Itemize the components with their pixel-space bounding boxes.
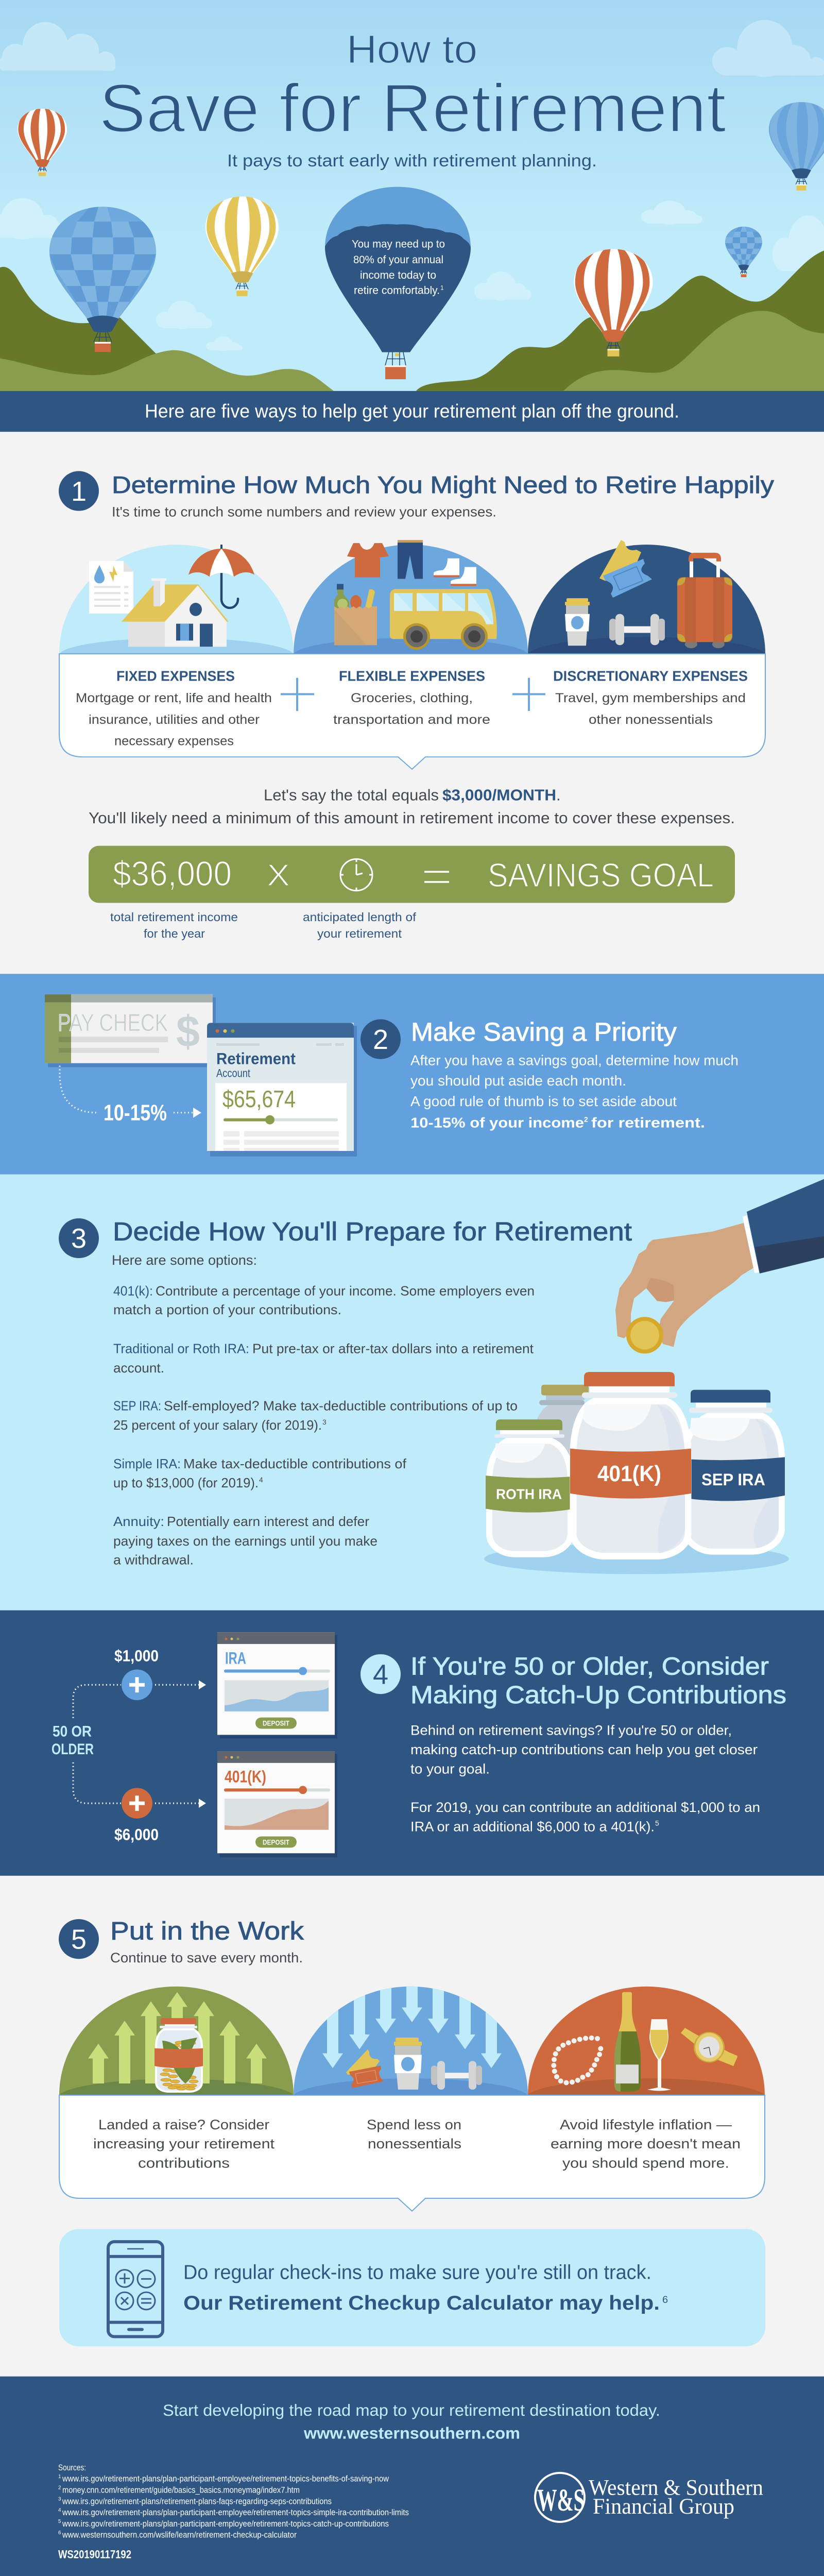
callout: calculator: 6	[662, 2294, 668, 2306]
lifestyle text: earning more doesn't mean	[551, 2136, 741, 2151]
title: Save for Retirement: Save for Retirement	[99, 70, 726, 146]
plus sign	[512, 678, 545, 711]
text block: step 2: After you have a savings goal, determine how much	[410, 1053, 739, 1069]
icon: utility bill	[89, 561, 133, 614]
balloon text: You may need up to	[352, 239, 445, 250]
icon: champagne bottle	[614, 1992, 641, 2092]
icon: orange balloon small	[18, 108, 67, 176]
text block: retirement options	[113, 1284, 535, 1567]
text block: step 2	[360, 1017, 739, 1130]
dome: fixed expenses	[59, 545, 294, 654]
flexible expenses text	[333, 668, 490, 727]
text block: step 3 heading: 3	[71, 1223, 87, 1254]
icon: coffee cup	[394, 2038, 422, 2090]
panel: hero sky	[0, 0, 824, 393]
icon: umbrella	[188, 545, 254, 608]
flexible expenses text: FLEXIBLE EXPENSES	[339, 668, 485, 684]
text block: total equals: Let's say the total equals	[264, 786, 439, 804]
title: How to: How to	[347, 27, 477, 72]
text block: retirement options: up to $13,000 (for 2019).	[113, 1476, 259, 1490]
down arrows	[322, 1980, 502, 2068]
sources: WS20190117192	[58, 2548, 131, 2561]
spend text	[367, 2117, 461, 2151]
text block: step 2: A good rule of thumb is to set aside about	[410, 1093, 677, 1109]
icon: savings jars	[484, 1372, 789, 1574]
panel: savings goal formula: SAVINGS GOAL	[488, 856, 714, 894]
discretionary expenses text: DISCRETIONARY EXPENSES	[553, 668, 748, 684]
text block: step 3 heading: Decide How You'll Prepare for Retirement	[113, 1217, 632, 1246]
panel: step 1 heading: 1	[71, 476, 87, 507]
icon: coffee cup	[565, 598, 590, 646]
subtitle: It pays to start early with retirement planning.	[227, 151, 597, 171]
banner: Here are five ways to help get your retirement plan off the ground.	[145, 401, 679, 421]
text block: retirement options: 4	[259, 1476, 263, 1484]
text block: total equals	[89, 786, 735, 827]
text block: retirement options: 401(k):	[113, 1284, 153, 1298]
icon: orange balloon large	[574, 248, 653, 357]
callout: calculator: Do regular check-ins to make sure you're still on track.	[183, 2262, 651, 2283]
panel: savings goal formula: X	[267, 858, 290, 892]
raise text: increasing your retirement	[93, 2136, 275, 2151]
text block: step 5 heading	[59, 1917, 304, 1965]
text block: total equals: You'll likely need a minimum of this amount in retirement income to cover these expenses.	[89, 809, 735, 827]
panel: expenses box	[59, 654, 765, 769]
sources: 5	[58, 2519, 61, 2524]
formula captions	[110, 910, 417, 940]
footer call to action: www.westernsouthern.com	[303, 2424, 520, 2442]
text block: step 4: If You're 50 or Older, Consider	[410, 1653, 769, 1680]
lifestyle text	[551, 2117, 741, 2171]
text block: retirement options: a withdrawal.	[113, 1553, 194, 1567]
spend text: nonessentials	[368, 2136, 461, 2151]
footer call to action	[163, 2401, 660, 2442]
text block: step 4: Behind on retirement savings? If you're 50 or older,	[410, 1722, 732, 1738]
jar: 401k	[570, 1372, 691, 1556]
text block: step 3 heading	[59, 1217, 632, 1268]
chart: IRA window: IRA	[225, 1649, 246, 1668]
text block: step 4: 5	[655, 1819, 659, 1827]
text block: step 4: For 2019, you can contribute an additional $1,000 to an	[410, 1800, 760, 1815]
panel: step 1 heading: Determine How Much You Might Need to Retire Happily	[112, 471, 775, 498]
icon: pay check	[45, 994, 216, 1067]
icon: suitcase	[677, 553, 732, 648]
sources	[58, 2463, 409, 2561]
balloon text: income today to	[360, 269, 436, 281]
icon: retirement account window: $65,674	[222, 1086, 296, 1112]
icon: hand with coin	[615, 1179, 824, 1353]
callout: calculator	[59, 2229, 765, 2346]
formula captions: for the year	[144, 927, 205, 940]
text block: step 2: for retirement.	[591, 1115, 705, 1130]
icon: champagne glass	[647, 2019, 671, 2091]
spend text: Spend less on	[367, 2117, 461, 2132]
flexible expenses text: transportation and more	[333, 713, 490, 727]
panel: savings goal formula	[89, 846, 735, 903]
raise text: contributions	[138, 2156, 230, 2171]
chart: 401(k) window: DEPOSIT	[263, 1838, 289, 1846]
sources: money.cnn.com/retirement/guide/basics_basics.moneymag/index7.htm	[62, 2485, 300, 2495]
sources: www.irs.gov/retirement-plans/plan-participant-employee/retirement-topics-benefits-of-saving-now	[62, 2474, 389, 2484]
formula captions: your retirement	[317, 927, 402, 940]
icon: watch	[681, 2028, 737, 2066]
logo: Western & Southern	[535, 2473, 763, 2522]
icon: pearls	[554, 2038, 600, 2082]
diagram: 50 or older flow	[52, 1647, 206, 1843]
text block: retirement options: 3	[322, 1418, 327, 1426]
text block: step 4: IRA or an additional $6,000 to a 401(k).	[410, 1819, 655, 1835]
balloon text: 80% of your annual	[353, 254, 443, 266]
panel: step 2 background	[0, 974, 824, 1175]
text block: retirement options: Simple IRA:	[113, 1457, 181, 1471]
sources: 3	[58, 2496, 61, 2502]
balloon text	[352, 239, 445, 297]
plus sign	[281, 678, 314, 711]
formula captions: anticipated length of	[303, 910, 417, 924]
panel: step 4 background	[0, 1611, 824, 1876]
icon: tickets	[346, 2049, 384, 2088]
sources: www.irs.gov/retirement-plans/plan-participant-employee/retirement-topics-catch-up-contributions	[62, 2519, 389, 2529]
icon: bus	[390, 589, 497, 650]
icon: yellow balloon	[205, 196, 279, 296]
icon: central balloon with message	[325, 187, 471, 379]
text block: retirement options: Contribute a percentage of your income. Some employers even	[156, 1284, 535, 1298]
text block: retirement options: Put pre-tax or after-tax dollars into a retirement	[252, 1342, 534, 1356]
text block: retirement options: Potentially earn interest and defer	[167, 1515, 369, 1529]
chart: 401(k) window	[217, 1751, 337, 1857]
icon: small patchwork balloon	[725, 227, 762, 277]
balloon text: retire comfortably.	[354, 285, 440, 297]
sources: www.irs.gov/retirement-plans/retirement-plans-faqs-regarding-seps-contributions	[62, 2496, 332, 2506]
flexible expenses text: Groceries, clothing,	[351, 691, 473, 705]
logo: Western & Southern: W&S	[537, 2483, 585, 2518]
raise text: Landed a raise? Consider	[98, 2117, 269, 2132]
text block: step 5 heading: Put in the Work	[110, 1917, 304, 1945]
jar: roth ira	[486, 1419, 571, 1554]
sources: 4	[58, 2507, 61, 2513]
sources: 1	[58, 2474, 61, 2480]
icon: clock	[340, 859, 372, 891]
footer call to action: Start developing the road map to your retirement destination today.	[163, 2401, 660, 2419]
discretionary expenses text	[553, 668, 748, 727]
diagram: 50 or older flow: 50 OR	[53, 1723, 92, 1740]
text block: step 4	[360, 1653, 786, 1835]
panel: footer	[0, 2377, 824, 2576]
sources: www.irs.gov/retirement-plans/plan-participant-employee/retirement-topics-simple-ira-contribution-limits	[62, 2507, 409, 2517]
jar: back	[533, 1385, 589, 1470]
sources: 2	[58, 2485, 61, 2491]
text block: retirement options: Annuity:	[113, 1515, 164, 1529]
icon: patchwork balloon	[49, 207, 156, 352]
panel: step 3 background	[0, 1175, 824, 1611]
text block: retirement options: SEP IRA:	[113, 1399, 161, 1413]
panel: step 1 heading	[59, 471, 775, 520]
icon: dumbbell	[609, 614, 665, 645]
balloon text: 1	[440, 284, 444, 292]
lifestyle text: Avoid lifestyle inflation —	[560, 2117, 732, 2132]
icon: shirt	[347, 543, 389, 577]
chart: IRA window	[217, 1632, 337, 1738]
text block: retirement options: Self-employed? Make tax-deductible contributions of up to	[164, 1399, 518, 1413]
panel: savings goal formula: $36,000	[113, 855, 232, 893]
icon: groceries	[334, 584, 377, 645]
text block: step 2: 10-15% of your income	[410, 1115, 584, 1130]
sources: www.westernsouthern.com/wslife/learn/retirement-checkup-calculator	[62, 2530, 297, 2540]
icon: retirement account window	[207, 1023, 357, 1157]
diagram: 50 or older flow: OLDER	[52, 1741, 94, 1758]
discretionary expenses text: other nonessentials	[589, 713, 713, 727]
jar: sep ira: SEP IRA	[701, 1470, 765, 1489]
text block: step 2: 2	[373, 1024, 388, 1055]
dome: discretionary expenses	[528, 540, 765, 654]
icon: plus orange	[122, 1788, 152, 1819]
fixed expenses text	[76, 668, 272, 748]
icon: boots	[434, 558, 476, 586]
text block: step 2: you should put aside each month.	[410, 1073, 626, 1089]
arrow: dotted paycheck to account	[60, 1066, 201, 1126]
text block: step 4: 4	[373, 1659, 388, 1690]
icon: dumbbell	[431, 2061, 482, 2090]
fixed expenses text: insurance, utilities and other	[89, 713, 260, 727]
discretionary expenses text: Travel, gym memberships and	[555, 691, 746, 705]
text block: step 2: 2	[584, 1115, 588, 1124]
diagram: 50 or older flow: $1,000	[114, 1647, 159, 1665]
dome: flexible expenses	[294, 540, 528, 654]
panel: step 1 heading: It's time to crunch some numbers and review your expenses.	[112, 504, 496, 520]
lifestyle text: you should spend more.	[562, 2156, 729, 2171]
fixed expenses text: necessary expenses	[114, 734, 234, 748]
logo: Western & Southern: Western & Southern	[589, 2476, 763, 2500]
icon: blue striped balloon	[769, 101, 824, 191]
jar: roth ira: ROTH IRA	[496, 1486, 562, 1502]
arrow: dotted paycheck to account: 10-15%	[104, 1100, 167, 1126]
mountains	[0, 250, 824, 391]
fixed expenses text: FIXED EXPENSES	[116, 668, 235, 684]
jar: 401k: 401(K)	[597, 1461, 661, 1486]
sources: Sources:	[58, 2463, 86, 2472]
text block: step 3 heading: Here are some options:	[112, 1252, 257, 1268]
text block: retirement options: Make tax-deductible contributions of	[183, 1457, 407, 1471]
text block: total equals: $3,000/MONTH	[442, 786, 556, 804]
icon: retirement account window: Account	[216, 1066, 250, 1079]
jar: sep ira	[685, 1390, 785, 1552]
text block: retirement options: account.	[113, 1361, 164, 1376]
text block: step 5 heading: 5	[71, 1924, 87, 1955]
icon: jeans	[398, 540, 423, 579]
panel: step 5 box	[59, 2095, 765, 2211]
fixed expenses text: Mortgage or rent, life and health	[76, 691, 272, 705]
text block: step 4: making catch-up contributions can help you get closer	[410, 1742, 758, 1757]
formula captions: total retirement income	[110, 910, 238, 924]
icon: retirement account window: Retirement	[216, 1049, 296, 1068]
diagram: 50 or older flow: $6,000	[114, 1825, 159, 1843]
icon: plus blue	[122, 1670, 152, 1700]
icon: tickets	[599, 540, 652, 598]
text block: retirement options: Traditional or Roth IRA:	[113, 1342, 249, 1356]
text block: retirement options: match a portion of your contributions.	[113, 1303, 341, 1317]
dome: lifestyle inflation	[527, 1987, 765, 2095]
icon: house	[122, 578, 229, 647]
text block: retirement options: 25 percent of your salary (for 2019).	[113, 1418, 322, 1433]
text block: step 5 heading: Continue to save every month.	[110, 1950, 303, 1965]
chart: 401(k) window: 401(K)	[225, 1767, 266, 1786]
icon: jar of savings	[154, 2018, 203, 2092]
chart: IRA window: DEPOSIT	[263, 1719, 289, 1727]
icon: phone calculator	[108, 2242, 163, 2336]
dome: raise arrows and jar	[59, 1987, 294, 2095]
clouds	[0, 20, 824, 351]
text block: total equals: .	[556, 786, 561, 804]
banner	[0, 391, 824, 432]
text block: retirement options: paying taxes on the earnings until you make	[113, 1534, 377, 1549]
raise text	[93, 2117, 275, 2171]
icon: pay check: $	[176, 1007, 200, 1056]
dome: spend less	[294, 1980, 528, 2095]
text block: step 2: Make Saving a Priority	[411, 1017, 677, 1046]
text block: step 4: Making Catch-Up Contributions	[410, 1681, 786, 1709]
icon: pay check: PAY CHECK	[58, 1009, 168, 1037]
callout: calculator: Our Retirement Checkup Calculator may help.	[183, 2292, 660, 2314]
up arrows	[88, 1992, 267, 2083]
logo: Western & Southern: Financial Group	[593, 2494, 734, 2519]
text block: step 4: to your goal.	[410, 1761, 490, 1777]
sources: 6	[58, 2530, 61, 2536]
